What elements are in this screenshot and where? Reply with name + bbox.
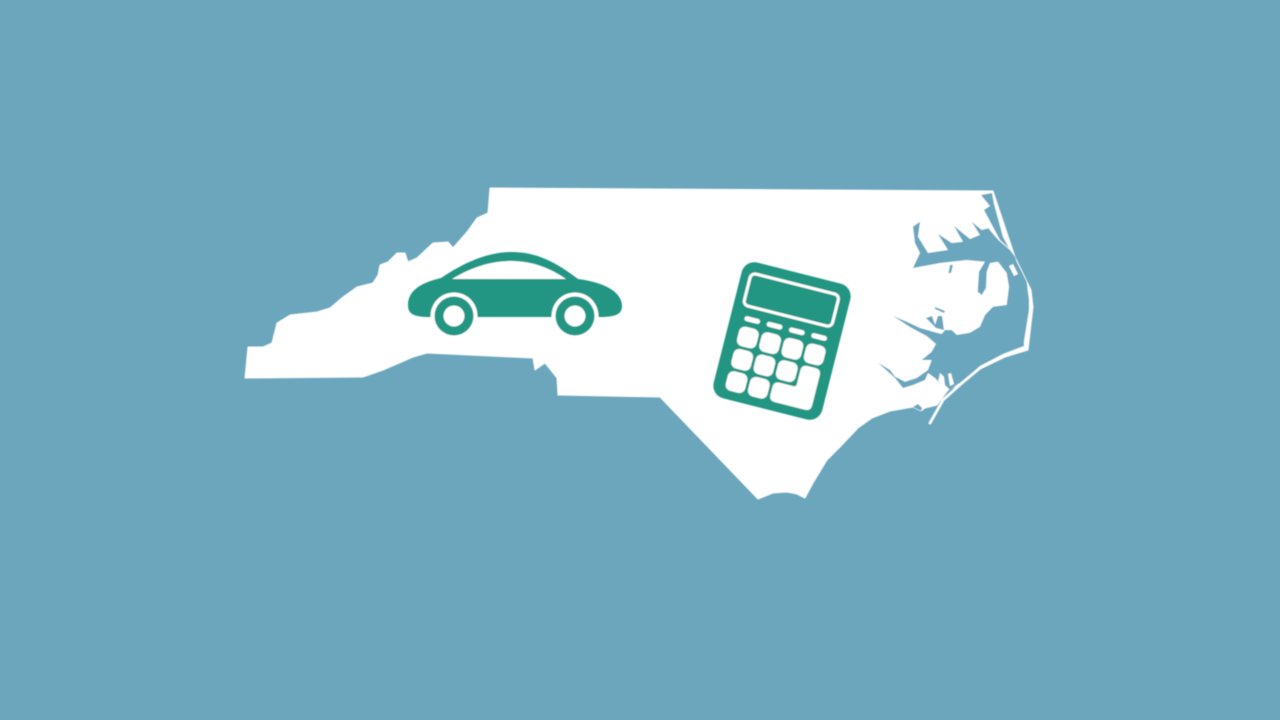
icon: car bbox=[408, 252, 622, 340]
car body bbox=[408, 252, 622, 317]
car window bbox=[452, 261, 566, 279]
front wheel bbox=[430, 292, 478, 340]
map: North Carolina bbox=[245, 188, 1033, 499]
rear wheel bbox=[552, 292, 598, 340]
state silhouette bbox=[245, 188, 1033, 499]
calculator body bbox=[711, 259, 853, 423]
function keys bbox=[744, 316, 827, 341]
calculator display bbox=[743, 273, 839, 327]
number keys bbox=[724, 325, 827, 411]
Albemarle and Pamlico sounds bbox=[878, 216, 1029, 390]
outer banks strip bbox=[930, 347, 1026, 423]
Core Banks island bbox=[948, 373, 954, 386]
small creeks bbox=[948, 265, 953, 273]
northern inlet bbox=[981, 193, 1009, 248]
icon: calculator bbox=[711, 259, 853, 423]
sounds and rivers bbox=[878, 193, 1029, 423]
Roanoke Island bbox=[1009, 264, 1018, 276]
